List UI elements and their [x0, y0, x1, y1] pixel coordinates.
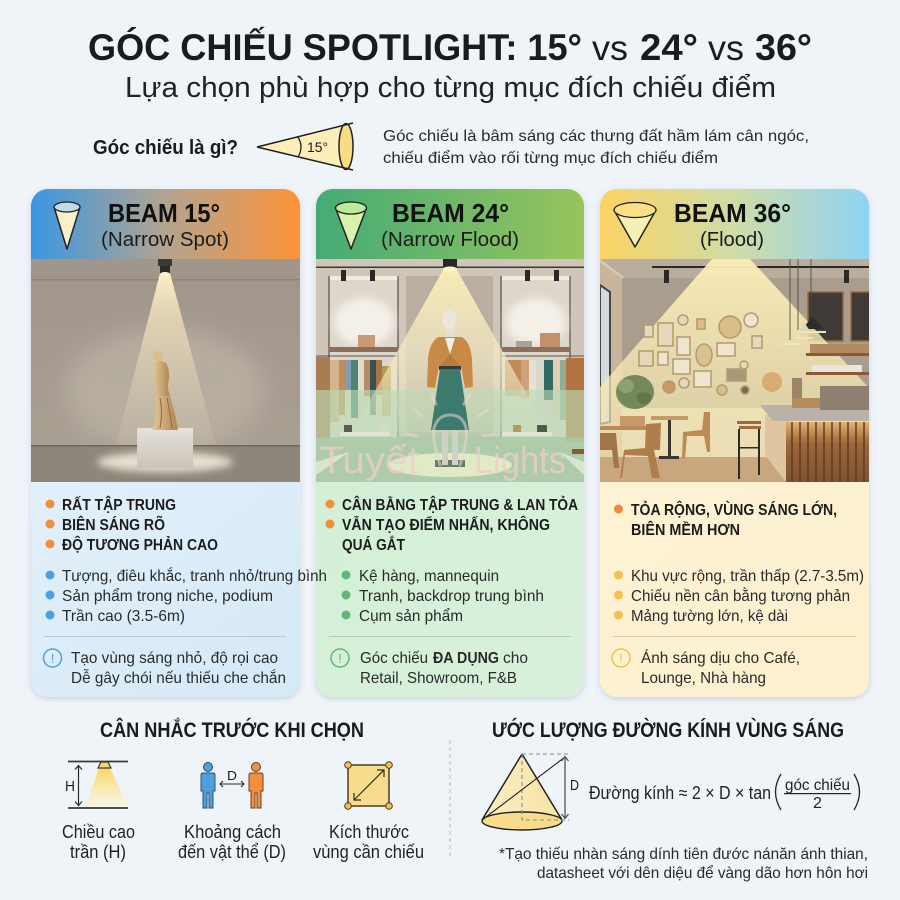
- panel title: beam 36: BEAM 36°: [674, 198, 791, 228]
- label: distance: Khoảng cách: [184, 822, 281, 842]
- callout: beam 36: [612, 648, 800, 687]
- formula: [589, 774, 860, 812]
- title: GÓC CHIẾU SPOTLIGHT: 15°: [88, 26, 582, 68]
- track lights: [341, 259, 559, 281]
- panel: beam 36: [600, 189, 871, 697]
- panel: beam 15: [31, 189, 300, 697]
- callout: beam 24: ĐA DỤNG: [433, 650, 499, 667]
- rack shoe shelves: [340, 425, 552, 436]
- footnote: *Tạo thiếu nhàn sáng dính tiên đước nánăn ánh thian,: [499, 846, 868, 863]
- use cases: beam 24: Kệ hàng, mannequin: [359, 568, 499, 585]
- use cases: beam 15: Trần cao (3.5-6m): [62, 608, 185, 625]
- callout: beam 36: !: [619, 651, 623, 666]
- formula: góc chiếu: [785, 777, 850, 794]
- label: area size: [313, 822, 424, 862]
- key traits: beam 24: VẪN TẠO ĐIỂM NHẤN, KHÔNG: [342, 515, 550, 534]
- panel header: beam 15: [31, 189, 300, 259]
- watermark text: Lights: Lights: [474, 440, 566, 482]
- panel title: beam 36: [674, 198, 791, 251]
- title: 36°: [755, 27, 812, 68]
- key traits: beam 36: TỎA RỘNG, VÙNG SÁNG LỚN,: [631, 500, 837, 519]
- photo: boutique mannequin under medium beam: [316, 259, 584, 482]
- key traits: beam 36: BIÊN MỀM HƠN: [631, 520, 740, 539]
- plant: [616, 375, 654, 409]
- icon: distance between people: [201, 762, 263, 808]
- title: vs: [708, 29, 744, 68]
- cafe tables and chairs: [600, 412, 710, 478]
- icon: ceiling height: H: [65, 778, 75, 795]
- wall art cluster: [639, 313, 762, 395]
- callout: beam 15: [44, 649, 286, 687]
- shelves: [806, 344, 869, 375]
- key traits: beam 15: RẤT TẬP TRUNG: [62, 495, 176, 514]
- counter: [760, 378, 869, 482]
- use cases: beam 24: Tranh, backdrop trung bình: [359, 588, 544, 605]
- callout: beam 15: Tạo vùng sáng nhỏ, độ rọi cao: [71, 650, 278, 667]
- panel header: beam 24: [316, 189, 584, 259]
- use cases: beam 36: [614, 568, 864, 625]
- icon: ceiling height: [65, 762, 128, 808]
- photo: cafe under wide beam: [600, 259, 871, 482]
- key traits: beam 15: BIÊN SÁNG RÕ: [62, 514, 165, 534]
- icon: beam angle cone 15 degrees: 15°: [307, 139, 328, 155]
- callout: beam 36: Ánh sáng dịu cho Café,: [641, 648, 800, 667]
- clothing rack right: [505, 358, 584, 442]
- floor: [600, 457, 790, 482]
- use cases: beam 36: Chiếu nền cân bằng tương phản: [631, 586, 850, 605]
- panel body: beam 36: [868, 682, 869, 683]
- icon: beam angle cone 15 degrees: [257, 123, 353, 170]
- plinth accents: [316, 452, 349, 475]
- intro heading: Góc chiếu là gì?: [93, 137, 238, 159]
- callout: beam 36: Lounge, Nhà hàng: [641, 670, 766, 687]
- use cases: beam 15: Tượng, điêu khắc, tranh nhỏ/trung bình: [62, 566, 327, 585]
- icon: narrow cone: [54, 202, 80, 249]
- label: ceiling height: trần (H): [70, 842, 126, 862]
- title: 24°: [640, 27, 698, 68]
- panel: beam 24: [316, 189, 584, 697]
- label: ceiling height: [62, 822, 135, 862]
- mannequin: [427, 310, 473, 465]
- panel body: beam 24: [316, 482, 584, 697]
- panel title: beam 36: (Flood): [700, 229, 764, 251]
- label: ceiling height: Chiều cao: [62, 822, 135, 842]
- heading: considerations: CÂN NHẮC TRƯỚC KHI CHỌN: [100, 718, 364, 742]
- panel body: beam 15: [31, 482, 300, 697]
- watermark text: Tuyết: Tuyết: [319, 440, 419, 482]
- chalkboards: [808, 292, 871, 341]
- clothing rack left: [316, 357, 391, 439]
- heading: beam diameter estimate: ƯỚC LƯỢNG ĐƯỜNG KÍNH VÙNG SÁNG: [492, 718, 844, 742]
- icon: medium cone: [336, 202, 366, 249]
- panel title: beam 24: [381, 198, 519, 251]
- label: area size: vùng cần chiếu: [313, 842, 424, 862]
- green watermark band: [316, 390, 584, 442]
- use cases: beam 36: Mảng tường lớn, kệ dài: [631, 608, 788, 625]
- key traits: beam 15: ĐỘ TƯƠNG PHẢN CAO: [62, 535, 218, 554]
- diagram: cone with distance D: [482, 754, 579, 830]
- intro description: chiếu điểm vào rối từng mục đích chiếu điểm: [383, 149, 718, 167]
- icon: target area size: [345, 762, 392, 809]
- panel title: beam 15: BEAM 15°: [108, 198, 220, 228]
- callout: beam 15: !: [51, 651, 54, 666]
- key traits: beam 24: CÂN BẰNG TẬP TRUNG & LAN TỎA: [342, 495, 578, 514]
- panel title: beam 24: BEAM 24°: [392, 198, 509, 228]
- icon: distance between people: D: [227, 768, 237, 783]
- diagram: cone with distance D: D: [570, 777, 579, 794]
- footnote: [499, 846, 868, 882]
- title: vs: [592, 29, 628, 68]
- callout: beam 24: cho: [503, 650, 528, 667]
- callout: beam 15: Dễ gây chói nếu thiếu che chắn: [71, 668, 286, 687]
- use cases: beam 36: Khu vực rộng, trần thấp (2.7-3.5m): [631, 568, 864, 585]
- formula: Đường kính ≈ 2 × D × tan: [589, 783, 771, 803]
- bar stool: [737, 421, 761, 479]
- use cases: beam 24: Cụm sản phẩm: [359, 607, 463, 625]
- intro description: [383, 128, 809, 167]
- subtitle: Lựa chọn phù hợp cho từng mục đích chiếu điểm: [125, 72, 776, 104]
- callout: beam 24: !: [338, 651, 342, 666]
- use cases: beam 15: [46, 566, 327, 625]
- intro description: Góc chiếu là bâm sáng các thưng đất hầm lám cân ngóc,: [383, 128, 809, 145]
- key traits: beam 24: QUÁ GẮT: [342, 535, 405, 554]
- label: area size: Kích thước: [329, 822, 409, 842]
- panel title: beam 15: [101, 198, 229, 251]
- flowers: [762, 372, 782, 392]
- key traits: beam 15: [46, 495, 218, 554]
- photo: gallery statue under narrow beam: [31, 259, 300, 482]
- panel title: beam 15: (Narrow Spot): [101, 229, 229, 251]
- callout: beam 24: [331, 649, 528, 687]
- panel header: beam 36: [600, 189, 869, 259]
- icon: wide cone: [614, 202, 656, 247]
- use cases: beam 15: Sản phẩm trong niche, podium: [62, 587, 273, 605]
- pendant lamps: [782, 259, 826, 345]
- watermark logo: bulb with rays: [406, 394, 494, 465]
- label: distance: [178, 822, 286, 862]
- callout: beam 24: Góc chiếu: [360, 650, 428, 667]
- callout: beam 24: Retail, Showroom, F&B: [360, 670, 517, 687]
- panel title: beam 24: (Narrow Flood): [381, 229, 519, 251]
- formula: 2: [813, 795, 822, 812]
- use cases: beam 24: [342, 568, 544, 625]
- label: distance: đến vật thể (D): [178, 842, 286, 862]
- footnote: datasheet với dên diệu để vàng dão hơn hôn hơi: [537, 864, 868, 882]
- key traits: beam 36: [614, 500, 837, 539]
- title: [88, 26, 812, 68]
- key traits: beam 24: [326, 495, 578, 554]
